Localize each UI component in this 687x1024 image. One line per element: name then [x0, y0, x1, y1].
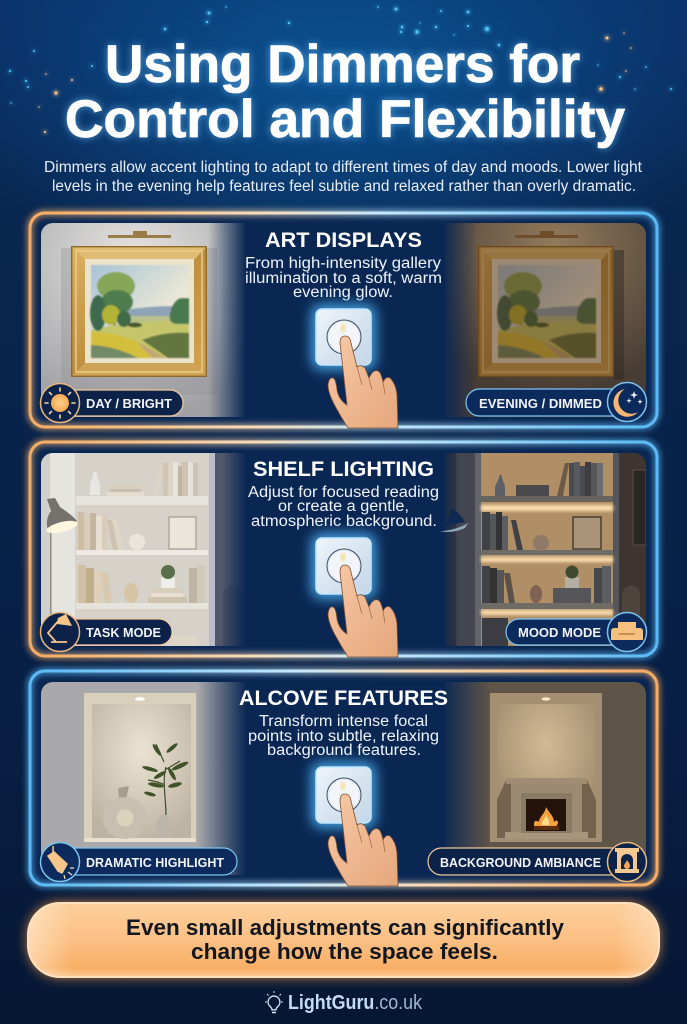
heading: SHELF LIGHTING — [253, 458, 434, 481]
image: dimmed painting — [441, 223, 646, 417]
label: mood mode — [506, 612, 646, 652]
label: day / bright: DAY / BRIGHT — [86, 396, 172, 411]
callout banner: Even small adjustments can significantly — [126, 915, 565, 940]
label: evening / dimmed: EVENING / DIMMED — [479, 396, 602, 411]
description: From high-intensity gallery — [245, 255, 441, 272]
label: task mode — [40, 612, 172, 652]
logo: LightGuru.co.uk — [288, 992, 423, 1014]
label: day / bright — [40, 384, 183, 422]
label: task mode: TASK MODE — [86, 625, 161, 640]
label: background ambiance — [428, 842, 646, 882]
description: Adjust for focused reading — [248, 484, 439, 501]
label: dramatic highlight: DRAMATIC HIGHLIGHT — [86, 855, 224, 870]
panel: art displays — [30, 213, 657, 428]
description: or create a gentle, — [278, 498, 409, 515]
intro text: Dimmers allow accent lighting to adapt to different times of day and moods. Lower light — [44, 159, 643, 176]
image: bright painting — [41, 223, 246, 417]
image: bright shelves — [41, 453, 246, 646]
description — [245, 255, 442, 301]
callout banner: change how the space feels. — [191, 939, 498, 964]
description — [248, 484, 439, 530]
decorative star field — [9, 6, 672, 133]
callout banner — [28, 903, 659, 977]
panel: shelf lighting — [30, 442, 657, 657]
dimmer switch and hand — [311, 762, 398, 886]
image: dimmed shelves — [440, 453, 646, 646]
heading: ALCOVE FEATURES — [239, 687, 448, 710]
dimmer switch and hand — [311, 304, 398, 428]
image: bright alcove — [41, 682, 246, 875]
description: evening glow. — [293, 284, 393, 301]
label: dramatic highlight — [40, 842, 237, 882]
image: dimmed alcove with fireplace — [446, 682, 646, 855]
description — [248, 713, 439, 759]
panel: alcove features — [30, 671, 657, 886]
heading: ART DISPLAYS — [265, 229, 422, 252]
dimmer switch and hand — [311, 533, 398, 657]
label: evening / dimmed — [466, 382, 646, 422]
intro text — [44, 159, 643, 195]
description: points into subtle, relaxing — [248, 728, 439, 745]
intro text: levels in the evening help features feel subtie and relaxed rather than overly dramatic. — [52, 178, 636, 195]
description: Transform intense focal — [259, 713, 428, 730]
description: illumination to a soft, warm — [245, 270, 442, 287]
title: Control and Flexibility — [65, 90, 626, 149]
title: Using Dimmers for — [105, 35, 580, 94]
description: atmospheric background. — [251, 513, 437, 530]
title — [65, 35, 626, 149]
description: background features. — [267, 742, 421, 759]
label: mood mode: MOOD MODE — [518, 625, 601, 640]
label: background ambiance: BACKGROUND AMBIANCE — [440, 855, 601, 870]
